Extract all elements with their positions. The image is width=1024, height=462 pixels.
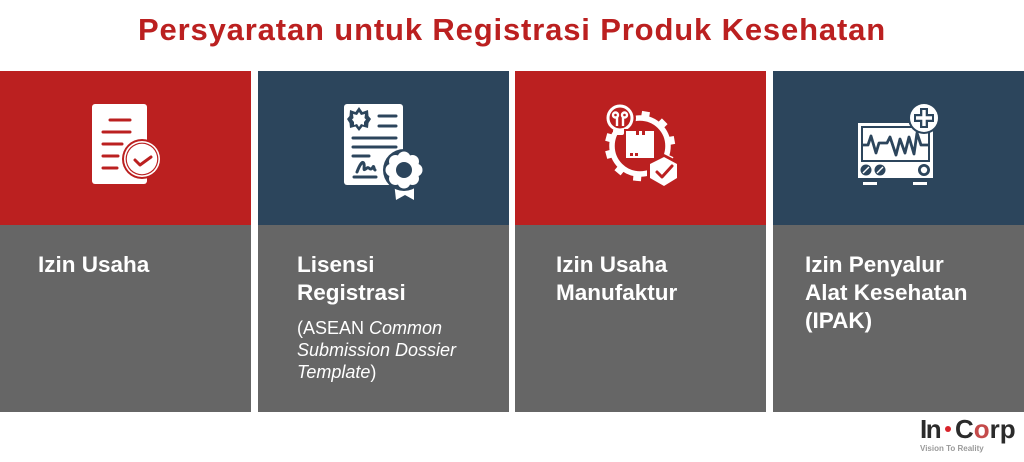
sub text: (ASEAN Common	[297, 318, 442, 338]
label: Alat Kesehatan	[805, 280, 968, 305]
label: Izin Penyalur	[805, 252, 944, 277]
title: Persyaratan untuk Registrasi Produk Kesehatan	[138, 12, 886, 47]
logo wordmark In: In	[920, 414, 940, 444]
icon: document with check	[92, 104, 160, 184]
sub text: Submission Dossier	[297, 340, 456, 360]
logo tagline: Vision To Reality	[920, 444, 984, 453]
label: Izin Usaha	[38, 252, 149, 277]
icon panel: Izin Usaha	[0, 71, 251, 225]
icon: medical monitor with plus	[858, 104, 938, 185]
sub text: Template)	[297, 362, 376, 382]
text panel: Izin Penyalur Alat Kesehatan	[773, 225, 1024, 412]
label: Lisensi	[297, 252, 375, 277]
label	[556, 252, 677, 305]
icon: gear with box, bulb and shield	[605, 104, 677, 186]
label: (IPAK)	[805, 308, 872, 333]
label: Registrasi	[297, 280, 406, 305]
text panel: Izin Usaha	[0, 225, 251, 412]
logo dot	[945, 426, 951, 432]
icon panel: Lisensi Registrasi	[258, 71, 509, 225]
label: Izin Usaha	[556, 252, 667, 277]
label	[805, 252, 968, 333]
panel: Izin Usaha Manufaktur	[515, 71, 766, 412]
panel: Izin Usaha	[0, 71, 251, 412]
sub text	[297, 318, 457, 382]
icon: certificate with rosette	[344, 104, 422, 200]
label	[297, 252, 406, 305]
logo wordmark Corp: Corp	[955, 414, 1016, 444]
icon panel: Izin Usaha Manufaktur	[515, 71, 766, 225]
panel: Izin Penyalur Alat Kesehatan	[773, 71, 1024, 412]
label: Manufaktur	[556, 280, 677, 305]
text panel: Lisensi Registrasi	[258, 225, 509, 412]
logo: InCorp	[920, 414, 1016, 453]
text panel: Izin Usaha Manufaktur	[515, 225, 766, 412]
icon panel: Izin Penyalur Alat Kesehatan	[773, 71, 1024, 225]
panel: Lisensi Registrasi	[258, 71, 509, 412]
